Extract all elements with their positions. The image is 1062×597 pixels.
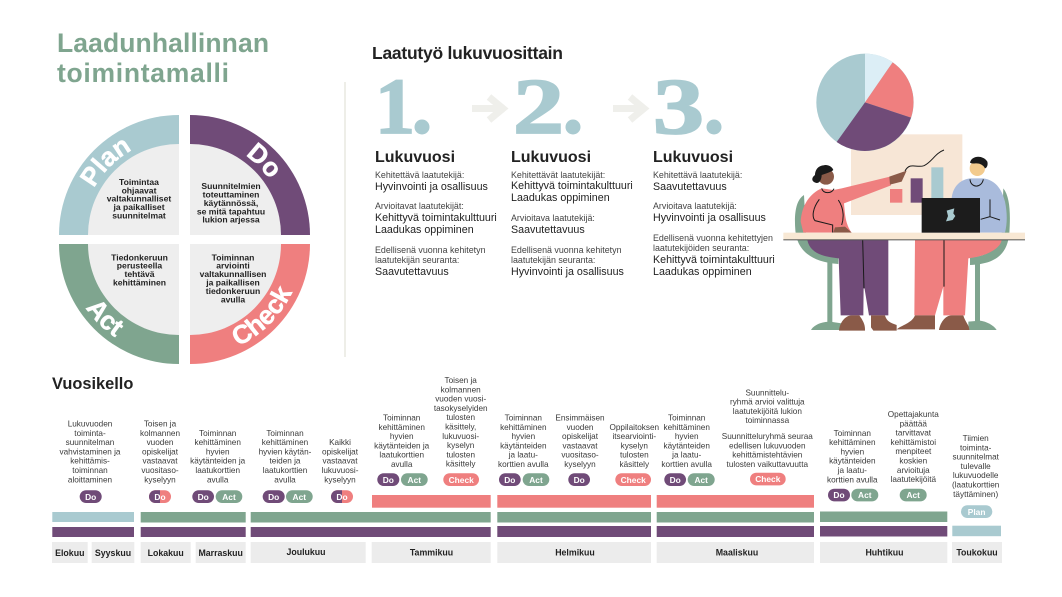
- panel: Act quadrant: [59, 244, 179, 364]
- panel: Check quadrant: arviointi: [216, 261, 250, 271]
- column: year 1: Laadukas oppiminen: [375, 224, 474, 236]
- pill: Do, marraskuu: Do: [198, 492, 209, 502]
- pill: Do split, joulukuu: Do: [336, 492, 348, 502]
- label: Lukuvuoden: vahvistaminen ja: [60, 447, 121, 456]
- month labels: Elokuu: [55, 548, 84, 558]
- label: Toisen ja kolmannen vuoden tulokset: käsittely,: [445, 422, 476, 432]
- label: Toiminnan kehittäminen, tammikuu: kehittäminen: [378, 423, 425, 432]
- panel: Check quadrant: avulla: [221, 294, 245, 304]
- label: Toisen ja kolmannen: vastaavat: [142, 457, 178, 466]
- pill: Plan, toukokuu: [961, 505, 992, 518]
- label: Toiminnan kehittäminen, helmikuu: ja laatu-: [508, 451, 538, 460]
- label: Lukuvuoden: suunnitelman: [66, 438, 115, 447]
- label: Toiminnan kehittäminen, marraskuu: kehittäminen: [194, 438, 241, 447]
- month labels: Maaliskuu: [716, 548, 758, 558]
- left chair: [795, 195, 842, 330]
- pill: Do, maaliskuu: [664, 473, 686, 486]
- month labels: Toukokuu: [956, 548, 998, 558]
- title: Laadunhallinnan: [57, 28, 269, 58]
- label: Toiminnan kehittäminen, huhtikuu: hyvien: [840, 447, 865, 456]
- label: Suunnitteluryhmä seuraa: kehittämistehtävien: [732, 451, 803, 460]
- panel: Check quadrant: tiedonkeruun: [206, 286, 260, 296]
- column: year 1: Hyvinvointi ja osallisuus: [375, 181, 488, 193]
- label: Suunnitteluryhmä arvioi: Suunnittelu-: [745, 388, 789, 397]
- column: year 3: [653, 149, 775, 278]
- icon: pie chart: [816, 54, 914, 151]
- pill: Do, joulukuu: [263, 490, 285, 503]
- title: toimintamalli: [57, 58, 229, 88]
- label: Tiimien toimintasuunnitelmat: tulevalle: [961, 462, 991, 471]
- label: Toiminnan kehittäminen, maaliskuu: käytänteiden: [663, 441, 710, 450]
- label: Toiminnan kehittäminen, maaliskuu: kehittäminen: [663, 423, 710, 432]
- panel: Check quadrant: Toiminnan: [212, 252, 254, 262]
- pill: Do split, joulukuu: [331, 490, 353, 503]
- pill: Do, marraskuu: [192, 490, 214, 503]
- label: Oppilaitoksen itsearviointi: Oppilaitoksen: [609, 423, 660, 432]
- PDCA circle diagram: [59, 115, 310, 364]
- panel: Act quadrant: kehittäminen: [113, 278, 166, 288]
- label: Suunnitteluryhmä arvioi: toiminnassa: [745, 416, 790, 425]
- pill: Check, maaliskuu: [750, 473, 786, 485]
- label: Opettajakunta päättää: laatutekijöitä: [891, 475, 937, 484]
- heading: Laatutyö lukuvuosittain: Laatutyö lukuvuosittain: [372, 43, 563, 63]
- pill: Act, marraskuu: [216, 490, 242, 503]
- label: Toiminnan kehittäminen, maaliskuu: Toiminnan: [668, 414, 706, 422]
- label: Kaikki opiskelijat: opiskelijat: [322, 447, 359, 456]
- table top: [783, 233, 1025, 240]
- timeline labels: [60, 376, 1000, 499]
- column: year 3: Hyvinvointi ja osallisuus: [653, 212, 766, 224]
- panel: Do quadrant: se mitä tapahtuu: [197, 206, 265, 216]
- label: Opettajakunta päättää: koskien: [899, 456, 928, 466]
- panel: Plan quadrant: valtakunnalliset: [107, 194, 171, 204]
- column: year 2: Laadukas oppiminen: [511, 192, 610, 204]
- numeral 1: 1: [375, 64, 415, 151]
- label: Toiminnan kehittäminen, helmikuu: hyvien: [511, 432, 536, 441]
- label: Toiminnan kehittäminen, tammikuu: laatukorttien: [379, 451, 424, 460]
- panel: Check quadrant: Check: [232, 285, 293, 344]
- numeral 2: [513, 64, 580, 151]
- month labels: [52, 542, 1002, 563]
- timeline pills: [80, 473, 992, 518]
- illustration: two people at a table with charts: [783, 54, 1025, 331]
- pill: Act, joulukuu: Act: [293, 492, 306, 502]
- label: Toiminnan kehittäminen, marraskuu: laatukorttien: [195, 466, 240, 475]
- label: Ensimmäisen vuoden: opiskelijat: [562, 432, 599, 441]
- pill: Do, joulukuu: Do: [268, 492, 279, 502]
- label: Toiminnan kehittäminen, huhtikuu: ja laatu-: [837, 466, 867, 475]
- label: Toiminnan kehittäminen, helmikuu: kehittäminen: [500, 423, 547, 432]
- arrow 2 to 3: [613, 97, 644, 120]
- column: year 2: Arvioitava laatutekijä:: [511, 213, 595, 223]
- pill: Do, elokuu: Do: [85, 492, 96, 502]
- title: [57, 28, 269, 88]
- pill: Act, huhtikuu: [851, 489, 878, 501]
- label: Toiminnan kehittäminen, maaliskuu: korttien avulla: [661, 460, 712, 469]
- pill: Act, helmikuu: Act: [529, 475, 543, 485]
- label: Tiimien toimintasuunnitelmat: Tiimien: [963, 434, 989, 443]
- right chair: [968, 188, 1010, 330]
- label: Toisen ja kolmannen vuoden tulokset: Toisen ja: [445, 376, 477, 385]
- label: Toisen ja kolmannen: opiskelijat: [142, 447, 179, 456]
- column: year 1: laatutekijän seuranta:: [375, 255, 459, 265]
- panel: Plan quadrant: ja paikalliset: [112, 202, 165, 212]
- timeline phase bars: [52, 495, 1001, 537]
- panel: Plan quadrant: Plan: [80, 140, 131, 187]
- man with laptop: [897, 157, 1007, 330]
- panel: Do quadrant: Suunnitelmien: [201, 181, 261, 191]
- month labels: Marraskuu: [198, 548, 243, 558]
- label: Toisen ja kolmannen vuoden tulokset: vuoden vuosi-: [435, 395, 486, 404]
- panel: Do quadrant: lukion arjessa: [202, 214, 260, 224]
- column: year 2: Edellisenä vuonna kehitetyn: [511, 245, 622, 255]
- label: Opettajakunta päättää: tarvittavat: [896, 429, 932, 438]
- pill: Check, tammikuu: Check: [449, 475, 474, 485]
- column: year 2: Hyvinvointi ja osallisuus: [511, 266, 624, 278]
- label: Tiimien toimintasuunnitelmat: täyttäminen): [953, 490, 998, 499]
- label: Toiminnan kehittäminen, tammikuu: hyvien: [390, 432, 414, 441]
- label: Toisen ja kolmannen vuoden tulokset: käsittely: [446, 460, 476, 469]
- column: year 2: Lukuvuosi: [511, 149, 591, 166]
- pill: Do, helmikuu 2: Do: [574, 475, 585, 485]
- column: year 1: Kehittyvä toimintakulttuuri: [375, 212, 497, 224]
- label: Toiminnan kehittäminen, helmikuu: korttien avulla: [498, 460, 549, 469]
- pill: Act, maaliskuu: [688, 473, 715, 486]
- label: Kaikki opiskelijat: vastaavat: [322, 457, 358, 466]
- month labels: Huhtikuu: [865, 548, 904, 558]
- label: Toisen ja kolmannen vuoden tulokset: lukuvuosi-: [442, 432, 479, 441]
- label: Opettajakunta päättää: päättää: [900, 419, 927, 428]
- label: Toiminnan kehittäminen, joulukuu: avulla: [274, 475, 296, 484]
- column: year 1: Lukuvuosi: [375, 149, 455, 166]
- woman presenter: [801, 150, 944, 331]
- panel: Plan quadrant: Toimintaa: [119, 177, 159, 187]
- label: Toiminnan kehittäminen, huhtikuu: kehittäminen: [829, 438, 876, 447]
- pill: Act, huhtikuu 2: Act: [906, 490, 920, 500]
- label: Ensimmäisen vuoden: kyselyyn: [564, 460, 596, 469]
- label: Lukuvuoden: toiminnan: [72, 466, 108, 475]
- label: Suunnitteluryhmä seuraa: Suunnitteluryhmä seuraa: [722, 432, 813, 441]
- label: Lukuvuoden: Lukuvuoden: [68, 420, 113, 428]
- label: Opettajakunta päättää: kehittämistoi: [891, 438, 936, 447]
- label: Kaikki opiskelijat: lukuvuosi-: [322, 466, 359, 475]
- label: Toisen ja kolmannen: kolmannen: [140, 429, 180, 438]
- numeral 3: 3: [653, 64, 704, 151]
- column: year 2: Saavutettavuus: [511, 224, 585, 236]
- label: Toisen ja kolmannen vuoden tulokset: tasokyselyiden: [434, 404, 488, 413]
- label: Ensimmäisen vuoden: Ensimmäisen: [555, 414, 605, 422]
- panel: Act quadrant: Tiedonkeruun: [111, 252, 168, 262]
- label: Toiminnan kehittäminen, marraskuu: avulla: [207, 475, 229, 484]
- label: Tiimien toimintasuunnitelmat: toiminta-: [960, 443, 992, 452]
- pill: Do, helmikuu 2: [568, 473, 590, 486]
- column: year 3: Laadukas oppiminen: [653, 266, 752, 278]
- label: Toisen ja kolmannen: vuositaso-: [141, 466, 179, 475]
- label: Tiimien toimintasuunnitelmat: suunnitelmat: [952, 453, 1000, 462]
- pill: Act, helmikuu: [523, 473, 549, 486]
- month labels: Lokakuu: [148, 548, 184, 558]
- label: Suunnitteluryhmä arvioi: ryhmä arvioi valittuja: [730, 398, 805, 407]
- label: Opettajakunta päättää: Opettajakunta: [888, 410, 939, 419]
- pill: Do split, lokakuu: [149, 490, 171, 503]
- column: year 2: Kehitettävät laatutekijät:: [511, 170, 605, 180]
- label: Ensimmäisen vuoden: vuositaso-: [561, 451, 599, 460]
- label: Oppilaitoksen itsearviointi: kyselyn: [621, 441, 648, 450]
- pill: Do, maaliskuu: Do: [670, 475, 681, 485]
- numeral 2: 2: [513, 64, 564, 151]
- label: Toiminnan kehittäminen, tammikuu: käytänteiden ja: [374, 441, 430, 450]
- pill: Act, tammikuu: [401, 473, 428, 486]
- laptop: [922, 198, 980, 233]
- column: year 3: laatutekijöiden seuranta:: [653, 243, 749, 253]
- label: Suunnitteluryhmä seuraa: edellisen lukuvuoden: [729, 441, 806, 450]
- pill: Do, tammikuu: Do: [383, 475, 394, 485]
- pill: Do, tammikuu: [377, 473, 399, 486]
- pill: Do split, lokakuu: Do: [154, 492, 166, 502]
- pill: Act, huhtikuu: Act: [858, 490, 872, 500]
- label: Toiminnan kehittäminen, joulukuu: Toiminnan: [266, 429, 304, 438]
- arrow 1 to 2: [472, 97, 503, 120]
- column: year 1: Kehitettävä laatutekijä:: [375, 170, 464, 180]
- pill: Do, helmikuu: [499, 473, 521, 486]
- column: year 3: Saavutettavuus: [653, 181, 727, 193]
- label: Toisen ja kolmannen vuoden tulokset: tulosten: [446, 413, 475, 422]
- label: Toiminnan kehittäminen, huhtikuu: käytänteiden: [829, 457, 876, 466]
- label: Toiminnan kehittäminen, huhtikuu: korttien avulla: [827, 475, 878, 484]
- label: Lukuvuoden: kehittämis-: [70, 457, 110, 466]
- panel: Check quadrant: ja paikallisen: [205, 277, 260, 287]
- panel: Act quadrant: tehtävä: [124, 269, 155, 279]
- pill: Act, huhtikuu 2: [900, 489, 927, 501]
- pill: Act, maaliskuu: Act: [694, 475, 708, 485]
- column: year 3: Arvioitava laatutekijä:: [653, 201, 737, 211]
- label: Opettajakunta päättää: arvioituja: [897, 466, 930, 475]
- column: year 3: Kehitettävä laatutekijä:: [653, 170, 742, 180]
- panel: Do quadrant: Do: [246, 142, 278, 176]
- column: year 1: Edellisenä vuonna kehitetyn: [375, 245, 486, 255]
- month labels: Tammikuu: [410, 548, 453, 558]
- pill: Do, huhtikuu: Do: [833, 490, 845, 500]
- numeral 3: [653, 64, 722, 151]
- label: Kaikki opiskelijat: Kaikki: [329, 438, 351, 447]
- column: year 1: Arvioitavat laatutekijät:: [375, 201, 464, 211]
- label: Oppilaitoksen itsearviointi: käsittely: [620, 460, 650, 469]
- column: year 2: laatutekijän seuranta:: [511, 255, 595, 265]
- pill: Act, tammikuu: Act: [408, 475, 421, 485]
- label: Lukuvuoden: aloittaminen: [68, 475, 113, 484]
- label: Toisen ja kolmannen: Toisen ja: [144, 420, 177, 428]
- label: Toiminnan kehittäminen, tammikuu: avulla: [391, 460, 413, 469]
- panel: Act quadrant: perusteella: [117, 261, 162, 271]
- panel: Check quadrant: valtakunnallisen: [200, 269, 266, 279]
- label: Toiminnan kehittäminen, joulukuu: teiden ja: [270, 457, 301, 466]
- column: year 1: [375, 149, 497, 278]
- label: Toiminnan kehittäminen, maaliskuu: ja laatu-: [671, 451, 702, 460]
- pill: Check, helmikuu: [615, 473, 651, 486]
- column: year 3: Lukuvuosi: [653, 149, 733, 166]
- label: Toiminnan kehittäminen, helmikuu: Toiminnan: [505, 414, 542, 422]
- pill: Plan, toukokuu: Plan: [968, 507, 985, 517]
- label: Toiminnan kehittäminen, joulukuu: hyvien käytän-: [259, 447, 312, 456]
- heading: Vuosikello: Vuosikello: [52, 375, 133, 393]
- panel: Plan quadrant: suunnitelmat: [112, 210, 166, 220]
- label: Suunnitteluryhmä seuraa: tulosten vaikuttavuutta: [727, 460, 808, 469]
- label: Toiminnan kehittäminen, marraskuu: Toiminnan: [199, 429, 237, 438]
- month labels: Joulukuu: [286, 547, 326, 557]
- label: Tiimien toimintasuunnitelmat: (laatukorttien: [952, 480, 1000, 490]
- label: Toiminnan kehittäminen, marraskuu: käytänteiden ja: [190, 457, 246, 466]
- label: Toiminnan kehittäminen, maaliskuu: hyvien: [675, 432, 699, 441]
- column: year 3: Kehittyvä toimintakulttuuri: [653, 254, 775, 266]
- backdrop panel with bar chart: [851, 134, 962, 215]
- column: year 2: [511, 149, 633, 278]
- pill: Do, huhtikuu: [828, 489, 850, 501]
- panel: Plan quadrant: [59, 115, 179, 235]
- label: Toiminnan kehittäminen, joulukuu: kehittäminen: [262, 438, 309, 447]
- label: Toisen ja kolmannen vuoden tulokset: kyselyn: [447, 441, 475, 450]
- panel: Check quadrant: [190, 244, 310, 364]
- pill: Do, elokuu: [80, 490, 102, 503]
- panel: Do quadrant: käytännössä,: [204, 198, 258, 208]
- label: Tiimien toimintasuunnitelmat: lukuvuodelle: [953, 471, 999, 480]
- column: year 3: Edellisenä vuonna kehitettyjen: [653, 233, 773, 243]
- panel: Do quadrant: [190, 115, 310, 235]
- label: Toiminnan kehittäminen, tammikuu: Toiminnan: [383, 414, 421, 422]
- column: year 1: Saavutettavuus: [375, 266, 449, 278]
- month labels: Syyskuu: [95, 548, 131, 558]
- label: Lukuvuoden: toiminta-: [74, 429, 106, 438]
- label: Ensimmäisen vuoden: vastaavat: [562, 441, 598, 450]
- label: Oppilaitoksen itsearviointi: tulosten: [620, 451, 649, 460]
- label: Suunnitteluryhmä arvioi: laatutekijöitä lukion: [733, 407, 802, 416]
- label: Opettajakunta päättää: menpiteet: [895, 447, 932, 456]
- pill: Act, marraskuu: Act: [222, 492, 236, 502]
- label: Toiminnan kehittäminen, huhtikuu: Toiminnan: [834, 429, 871, 438]
- label: Toiminnan kehittäminen, marraskuu: hyvien: [206, 447, 230, 456]
- month labels: Helmikuu: [555, 548, 595, 558]
- pill: Act, joulukuu: [286, 490, 313, 503]
- label: Toisen ja kolmannen vuoden tulokset: kolmannen: [441, 385, 481, 394]
- label: Toisen ja kolmannen vuoden tulokset: tulosten: [446, 450, 475, 459]
- label: Oppilaitoksen itsearviointi: itsearviointi-: [612, 432, 656, 441]
- label: Ensimmäisen vuoden: vuoden: [567, 423, 594, 432]
- pill: Do, helmikuu: Do: [504, 475, 515, 485]
- panel: Do quadrant: toteuttaminen: [203, 190, 259, 200]
- pill: Check, tammikuu: [443, 473, 479, 486]
- label: Toiminnan kehittäminen, helmikuu: käytänteiden: [500, 441, 547, 450]
- column: year 2: Kehittyvä toimintakulttuuri: [511, 180, 633, 192]
- panel: Plan quadrant: ohjaavat: [122, 186, 157, 196]
- panel: Act quadrant: Act: [85, 302, 124, 338]
- pill: Check, maaliskuu: Check: [755, 474, 781, 484]
- label: Toisen ja kolmannen: kyselyyn: [144, 475, 176, 484]
- label: Toiminnan kehittäminen, joulukuu: laatukorttien: [263, 466, 308, 475]
- pill: Check, helmikuu: Check: [621, 475, 646, 485]
- label: Toisen ja kolmannen: vuoden: [147, 438, 174, 447]
- label: Kaikki opiskelijat: kyselyyn: [324, 475, 356, 484]
